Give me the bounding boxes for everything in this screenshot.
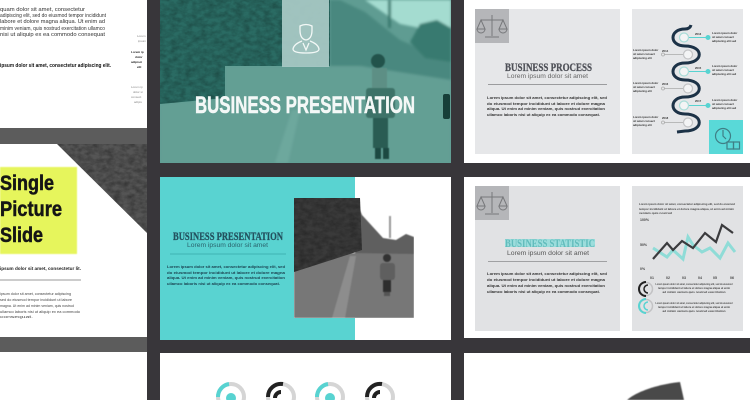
text block: timeline labels: sit amet consect [712, 102, 734, 106]
panel: single picture slide [0, 144, 147, 337]
icon: balance scale [475, 186, 509, 220]
image: diagonal stone wall [57, 144, 147, 233]
image: shadowed wall [294, 198, 364, 274]
text block: timeline labels [633, 31, 738, 127]
panel: process text card [475, 9, 620, 154]
text block: cropped side labels: Lorem ip [131, 50, 144, 54]
icon: teal progress ring [639, 299, 652, 313]
heading: BUSINESS PROCESS [505, 60, 592, 74]
line chart: 01 [650, 276, 654, 280]
icon: balance scale [475, 9, 509, 43]
icon: dark progress ring [639, 282, 652, 296]
text block: timeline labels: sit amet consect [633, 85, 655, 89]
panel: process timeline card [632, 9, 743, 154]
text block: dark ring caption: tempor incididunt ut labore et dolore magna aliqua ut enim [658, 287, 731, 290]
text block: body copy: do eiusmod tempor incididunt ut labore et dolore magna [487, 101, 606, 106]
text block: subheading: Lorem ipsum dolor sit amet [187, 242, 268, 249]
text block: timeline labels: Lorem ipsum dolor [712, 64, 738, 68]
text block: body copy: aliqua. Ut enim ad minim veniam, quis nostrud exercitation [487, 106, 606, 111]
text block: timeline labels: Lorem ipsum dolor [712, 98, 738, 102]
timeline connectors [689, 36, 710, 108]
text block: timeline labels: sit amet consect [633, 52, 655, 56]
text block: dark ring caption [656, 283, 733, 294]
text block: timeline labels: Lorem ipsum dolor [633, 81, 659, 85]
text block: timeline labels: adipiscing elit [633, 123, 652, 127]
text block: teal ring caption [656, 302, 733, 313]
text block: dark ring caption: Lorem ipsum dolor sit amet, consectetur adipiscing elit, sed do eiusmod [656, 283, 733, 286]
text block: teal ring caption: Lorem ipsum dolor sit amet, consectetur adipiscing elit, sed do eiusmod [656, 302, 733, 305]
text block: body copy: aliqua. Ut enim ad minim veniam, quis nostrud exercitation [487, 283, 606, 288]
text block: caption: consequat. [0, 315, 33, 319]
chart: progress rings [218, 384, 393, 400]
text block: subheading: Lorem ipsum dolor sit amet [507, 250, 589, 257]
image: greyscale street photo [294, 198, 414, 318]
text block: caption: magna. Ut enim ad minim veniam, quis nostrud [0, 304, 74, 308]
text block: timeline labels: Lorem ipsum dolor [633, 115, 659, 119]
line chart: 02 [666, 276, 670, 280]
text block: body copy: ullamco laboris nisi ut aliquip ex ea commodo consequat. [487, 112, 600, 117]
text block: body copy: ullamco laboris nisi ut aliquip ex ea commodo consequat. [487, 289, 600, 294]
line chart: 06 [730, 276, 734, 280]
panel: business statistic slide [464, 177, 750, 338]
text block: cropped side labels: dolor [135, 55, 143, 59]
chart: winding timeline [662, 25, 710, 132]
panel: title slide with teal photo [160, 0, 451, 163]
callout: yellow title box: Picture [0, 198, 62, 221]
text block: cropped side labels [131, 34, 147, 104]
text block: subtitle: ipsum dolor sit amet, consectetur lit. [0, 266, 81, 271]
text block: dark ring caption: ad minim veniam quis nostrud exercitation [662, 291, 726, 294]
text block: caption [0, 292, 80, 319]
panel: lower-left blank slide [0, 352, 147, 400]
callout: yellow title box [0, 167, 77, 254]
image: walking child [366, 54, 395, 159]
text block: chart intro [639, 202, 735, 215]
text block: timeline labels: 2014 [662, 49, 669, 53]
text block: timeline labels: sit amet consect [712, 35, 734, 39]
icon: business person [293, 24, 319, 53]
line chart: 100% [640, 218, 650, 222]
text block: body copy: Lorem ipsum dolor sit amet, consectetur adipiscing elit, sed [487, 271, 608, 276]
text block: body copy [487, 271, 608, 294]
callout: yellow title box: Single [0, 172, 54, 195]
line chart [640, 218, 735, 280]
text block: timeline labels: 2016 [662, 82, 669, 86]
text block: cropped side labels: Lorem ip [131, 85, 143, 89]
text block: timeline labels: 2018 [662, 116, 669, 120]
panel: lower-middle slide with progress rings [160, 353, 451, 400]
text block: body copy: nisi ut aliquip ex ea commodo consequat [0, 32, 106, 38]
line chart: 04 [698, 276, 702, 280]
line chart: 0% [640, 267, 646, 271]
line chart: 05 [713, 276, 717, 280]
panel: teal split slide [160, 177, 451, 340]
grey band lower left [0, 337, 147, 352]
text block: body copy: Lorem ipsum dolor sit amet, consectetur adipiscing elit, sed [487, 95, 608, 100]
text block: body copy [487, 95, 608, 117]
text block: body copy: minim veniam, quis nostrud exercitation ullamco [0, 26, 105, 32]
text block: body copy [0, 7, 107, 38]
text block: caption: sed do eiusmod tempor incididunt ut labore [0, 298, 72, 302]
grey band between left slides [0, 128, 147, 144]
text block: body copy: quam dolor sit amet, consectetur [0, 7, 85, 13]
title: BUSINESS PRESENTATION [195, 92, 415, 119]
text block: timeline labels: 2013 [695, 32, 702, 36]
text block: timeline labels: adipiscing elit sed [712, 39, 737, 43]
text block: cropped side labels: consect [131, 95, 142, 99]
text block: timeline labels: 2015 [695, 66, 702, 70]
text block: chart intro: tempor incididunt ut labore et dolore magna aliqua, ut enim ad minim [639, 207, 735, 211]
image: cropped circular photo [627, 382, 684, 400]
text block: teal ring caption: ad minim veniam quis nostrud exercitation [662, 310, 726, 313]
panel: business process slide [464, 0, 750, 163]
panel: statistic text card [475, 186, 620, 331]
heading: BUSINESS STATISTIC [505, 236, 595, 250]
text block: timeline labels: adipiscing elit [633, 89, 652, 93]
panel: lower-right slide with cropped pie photo [464, 353, 750, 400]
text block: cropped side labels: ipsum [138, 39, 147, 43]
text block: timeline labels: adipiscing elit [633, 56, 652, 60]
line chart: 03 [682, 276, 686, 280]
timeline nodes [680, 33, 692, 127]
text block: timeline labels: adipiscing elit sed [712, 106, 737, 110]
text block: body copy: ullamco laboris nisi ut aliquip ex ea commodo consequat. [167, 281, 280, 286]
image: shadowed wall [160, 0, 330, 105]
heading: BUSINESS PRESENTATION [173, 229, 283, 243]
text block: body copy: Lorem ipsum dolor sit amet, consectetur adipiscing elit, sed [167, 264, 286, 269]
text block: timeline labels: Lorem ipsum dolor [712, 31, 738, 35]
text block: body copy: aliqua. Ut enim ad minim veniam, quis nostrud exercitation [167, 275, 286, 280]
icon: teal clock tile [709, 120, 743, 154]
text block: subheading: Lorem ipsum dolor sit amet [507, 73, 588, 80]
panel: translucent icon tab [282, 0, 329, 67]
text block: body copy: labore et dolore magna aliqua. Ut enim ad [0, 19, 105, 25]
text block: timeline labels: adipiscing elit sed [712, 72, 737, 76]
image: walking child [380, 254, 395, 296]
image: teal street photo [276, 0, 451, 162]
panel: statistic chart card [632, 186, 743, 331]
text block: body copy: do eiusmod tempor incididunt ut labore et dolore magna [487, 277, 606, 282]
text block: cropped side labels: adipis [134, 100, 142, 104]
text block: body copy: adipiscing elit, sed do eiusmod tempor incididunt [0, 13, 107, 19]
text block: caption: ullamco laboris nisi ut aliquip ex ea commodo [0, 310, 80, 314]
text block: timeline labels: sit amet consect [633, 119, 655, 123]
text block: body copy [167, 264, 286, 286]
text block: body copy: do eiusmod tempor incididunt ut labore et dolore magna [167, 270, 286, 275]
text block: timeline labels: 2017 [695, 99, 702, 103]
line chart: 50% [640, 243, 648, 247]
text block: chart intro: veniam quis nostrud [639, 211, 672, 215]
text block: timeline labels: Lorem ipsum dolor [633, 48, 659, 52]
text block: timeline labels: sit amet consect [712, 68, 734, 72]
panel: top-left cropped text slide [0, 0, 147, 128]
text block: cropped side labels: adipisci [131, 60, 142, 64]
text block: cropped side labels: Lorem [137, 34, 146, 38]
text block: caption: ipsum dolor sit amet, consectetur adipiscing [0, 292, 71, 296]
text block: cropped side labels: dolor si [133, 90, 143, 94]
text block: bold line: ipsum dolor sit amet, consectetur adipiscing elit. [0, 63, 112, 69]
image: traffic light [443, 94, 450, 119]
text block: chart intro: Lorem ipsum dolor sit amet, consectetur adipiscing elit, sed do eiusmod [639, 202, 735, 206]
text block: teal ring caption: tempor incididunt ut labore et dolore magna aliqua ut enim [658, 306, 731, 309]
text block: cropped side labels: elit [137, 65, 141, 69]
callout: yellow title box: Slide [0, 224, 43, 247]
